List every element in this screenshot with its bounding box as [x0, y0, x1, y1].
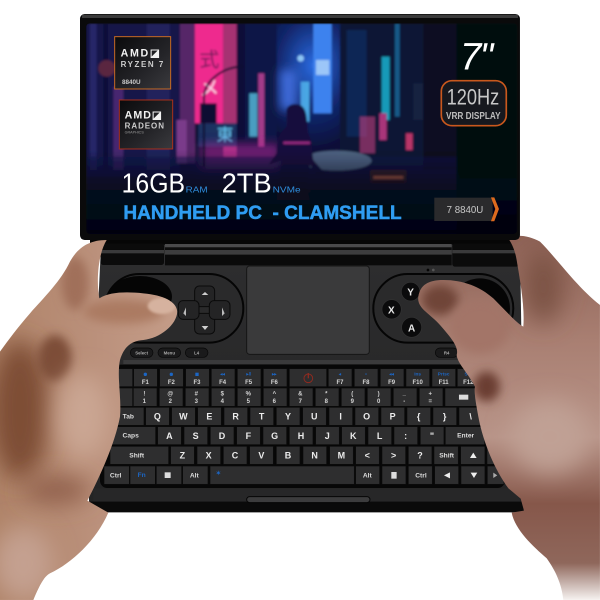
- bottom key row: Ctrl: [110, 473, 122, 480]
- home key row: [110, 427, 485, 445]
- screen image: neon city: [86, 23, 517, 237]
- function key row: F8: [362, 380, 370, 386]
- AMD Radeon badge: [119, 100, 173, 149]
- function key row: F11: [439, 380, 449, 386]
- function key row: F6: [271, 380, 278, 386]
- home key row: K: [350, 431, 357, 441]
- pink neon sign: 式: [199, 49, 219, 72]
- number key row: 7: [299, 399, 303, 405]
- right control capsule: [373, 274, 513, 343]
- shift key row: C: [232, 451, 239, 461]
- mic dots: [427, 269, 435, 271]
- function key row: ▸‖: [245, 372, 251, 377]
- d-pad: [178, 286, 230, 334]
- number key row: $: [221, 391, 225, 397]
- storage spec: 2TB: [222, 167, 272, 198]
- left buildings: [86, 23, 195, 177]
- RAM spec: 16GB: [122, 167, 185, 198]
- number key row: ): [378, 391, 380, 397]
- number key row: %: [246, 391, 252, 397]
- pink neon sign: [195, 23, 240, 157]
- QWERTY key row: Y: [285, 412, 291, 422]
- select button: Select: [135, 350, 149, 355]
- shift key row: M: [338, 451, 345, 461]
- number key row: (: [351, 391, 353, 397]
- number key row: !: [143, 391, 145, 397]
- number key row: 1: [143, 399, 147, 405]
- left control capsule: [105, 274, 243, 343]
- number key row: 3: [195, 399, 199, 405]
- function key row: F9: [388, 380, 396, 386]
- number key row: 9: [351, 399, 355, 405]
- shift key row: Shift: [439, 453, 455, 460]
- front lip and latch: [89, 488, 524, 512]
- storage spec: [222, 167, 301, 198]
- home key row: :: [404, 431, 407, 441]
- X button: [382, 300, 401, 319]
- function key row: F12: [463, 380, 474, 386]
- X button: X: [388, 305, 395, 316]
- home key row: Caps: [123, 433, 139, 440]
- bottom key row: Ctrl: [415, 473, 427, 480]
- Y button: [401, 282, 420, 301]
- home key row: L: [377, 431, 383, 441]
- number key row: [110, 388, 478, 406]
- bottom key row: ✶: [216, 470, 221, 477]
- QWERTY key row: W: [179, 412, 188, 422]
- L4 button: [185, 348, 208, 357]
- bottom key row: Fn: [138, 472, 146, 479]
- QWERTY key row: E: [206, 412, 212, 422]
- processor tag: 7 8840U: [447, 205, 483, 216]
- shift key row: Z: [180, 451, 186, 461]
- AMD Radeon badge: AMD◪: [125, 110, 162, 122]
- QWERTY key row: I: [339, 412, 342, 422]
- figure silhouette: [268, 104, 325, 200]
- R4 button: R4: [444, 350, 450, 355]
- AMD Radeon badge: GRAPHICS: [125, 131, 144, 135]
- home key row: J: [325, 431, 330, 441]
- shift key row: Shift: [129, 453, 145, 460]
- hinge: [90, 240, 523, 267]
- number key row: -: [403, 399, 405, 405]
- function key row: ◂: [338, 372, 342, 377]
- left hand: [0, 240, 178, 600]
- 120Hz VRR display badge: [441, 81, 506, 126]
- function key row: Ins: [414, 372, 421, 377]
- bottom key row: [104, 466, 504, 484]
- number key row: 0: [377, 399, 381, 405]
- laptop lid: [80, 14, 520, 240]
- QWERTY key row: T: [259, 412, 265, 422]
- shift key row: N: [311, 451, 318, 461]
- home key row: S: [193, 431, 199, 441]
- number key row: =: [429, 399, 433, 405]
- RAM spec: RAM: [186, 185, 208, 195]
- right analog stick: [450, 278, 510, 338]
- touchpad: [247, 266, 369, 354]
- QWERTY key row: R: [232, 412, 239, 422]
- select button: [130, 348, 153, 357]
- QWERTY key row: [110, 407, 483, 425]
- function key row: ◂◂: [388, 372, 395, 377]
- left analog stick: [108, 276, 172, 317]
- QWERTY key row: }: [443, 412, 447, 422]
- shift key row: B: [285, 451, 292, 461]
- right hand: [418, 236, 600, 600]
- device base: [89, 240, 524, 512]
- L4 button: L4: [194, 350, 200, 355]
- number key row: *: [325, 391, 328, 397]
- QWERTY key row: Q: [154, 412, 161, 422]
- function key row: ◂◂: [219, 372, 226, 377]
- pink neon sign: 東: [217, 126, 234, 145]
- keyboard: [89, 360, 524, 512]
- lamp post: [204, 67, 243, 167]
- number key row: #: [195, 391, 199, 397]
- screen size label: 7": [460, 35, 496, 78]
- 120Hz VRR display badge: VRR DISPLAY: [446, 111, 501, 122]
- AMD Ryzen 7 badge: 8840U: [122, 79, 141, 86]
- 120Hz VRR display badge: 120Hz: [447, 84, 499, 109]
- AMD Ryzen 7 badge: RYZEN 7: [121, 60, 164, 69]
- A button: A: [408, 323, 415, 334]
- function key row: Scr: [465, 372, 472, 377]
- home key row: G: [271, 431, 278, 441]
- function key row: ▪: [365, 372, 367, 377]
- function key row: Prtsc: [438, 372, 450, 377]
- function key row: F4: [219, 380, 227, 386]
- A button: [402, 317, 422, 337]
- sky and far tower: [237, 23, 343, 163]
- processor tag: [434, 197, 499, 221]
- home key row: A: [166, 431, 173, 441]
- function key row: F10: [412, 380, 423, 386]
- number key row: _: [402, 391, 407, 397]
- function key row: F7: [336, 380, 344, 386]
- number key row: 5: [247, 399, 251, 405]
- number key row: 8: [325, 399, 329, 405]
- number key row: 6: [273, 399, 277, 405]
- controls panel: [105, 266, 513, 357]
- QWERTY key row: Tab: [123, 414, 134, 421]
- shift key row: [110, 446, 504, 464]
- home key row: Enter: [457, 433, 475, 440]
- number key row: ^: [273, 391, 277, 397]
- bottom key row: Alt: [190, 473, 200, 480]
- R4 button: [435, 348, 458, 357]
- AMD Ryzen 7 badge: [115, 37, 171, 89]
- function key row: F5: [245, 380, 253, 386]
- shift key row: <: [365, 451, 370, 461]
- QWERTY key row: P: [390, 412, 396, 422]
- home key row: D: [219, 431, 226, 441]
- pink neon sign: メ: [199, 78, 219, 100]
- shift key row: X: [206, 451, 212, 461]
- Y button: Y: [407, 287, 414, 298]
- function key row: F3: [193, 380, 201, 386]
- product title: HANDHELD PC - CLAMSHELL: [123, 203, 402, 224]
- QWERTY key row: O: [363, 412, 370, 422]
- bottom key row: Alt: [363, 473, 373, 480]
- menu button: [158, 348, 181, 357]
- function key row: [110, 369, 481, 387]
- number key row: 2: [169, 399, 173, 405]
- right buildings: [340, 23, 517, 237]
- function key row: F1: [142, 380, 149, 386]
- QWERTY key row: \: [469, 412, 472, 422]
- AMD Ryzen 7 badge: AMD◪: [121, 47, 160, 59]
- home key row: ": [430, 431, 434, 441]
- number key row: 4: [221, 399, 225, 405]
- home key row: F: [246, 431, 252, 441]
- shift key row: V: [258, 451, 264, 461]
- street glow: [86, 143, 457, 237]
- home key row: H: [298, 431, 304, 441]
- QWERTY key row: {: [417, 412, 421, 422]
- number key row: @: [167, 391, 173, 397]
- shift key row: >: [391, 451, 396, 461]
- number key row: &: [298, 391, 303, 397]
- function key row: F2: [168, 380, 175, 386]
- QWERTY key row: U: [311, 412, 318, 422]
- shift key row: ?: [417, 451, 423, 461]
- AMD Radeon badge: RADEON: [125, 122, 164, 131]
- number key row: +: [429, 391, 433, 397]
- storage spec: NVMe: [273, 185, 301, 195]
- menu button: Menu: [164, 350, 175, 355]
- function key row: ▸▸: [271, 372, 277, 377]
